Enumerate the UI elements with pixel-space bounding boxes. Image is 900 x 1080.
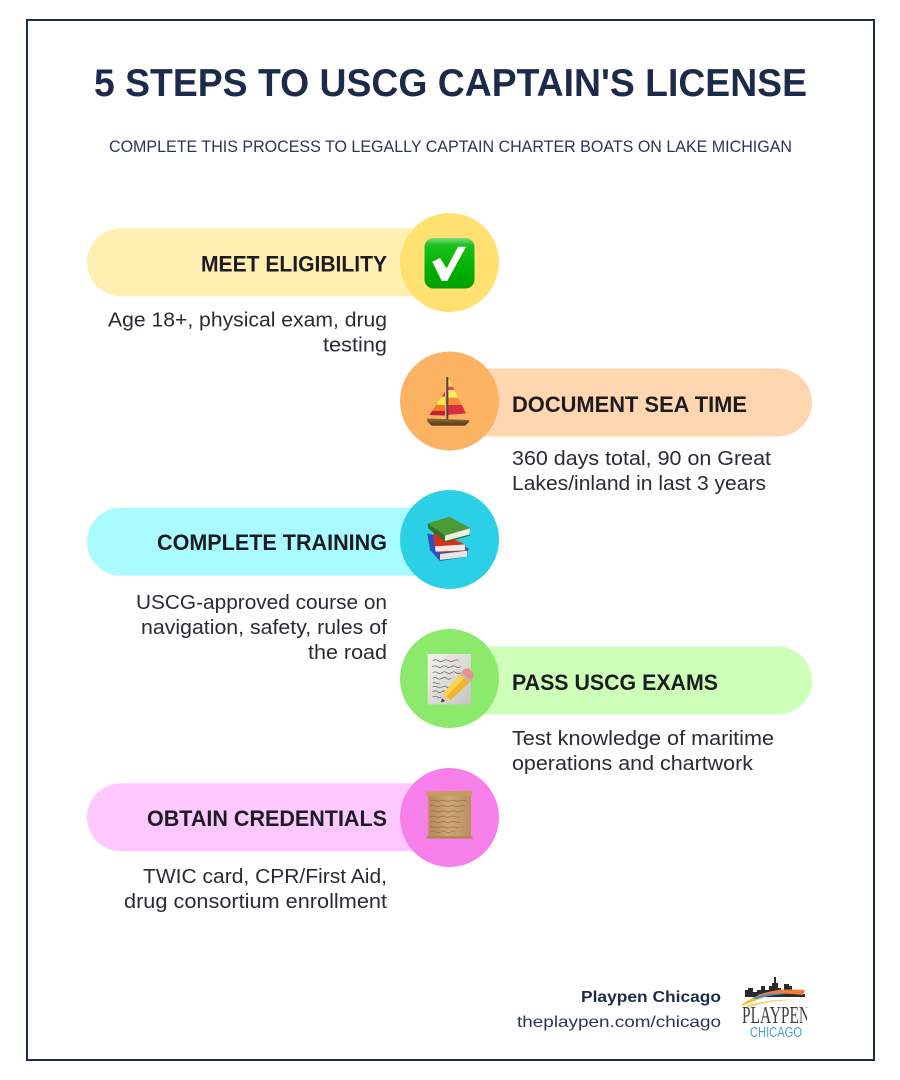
- step 3 pill: [87, 508, 449, 576]
- step 4 heading: PASS USCG EXAMS: [512, 670, 718, 695]
- step 5 description: TWIC card, CPR/First Aid,: [143, 866, 387, 888]
- step 2 description: [512, 448, 771, 495]
- logo word PLAYPEN: PLAYPEN: [742, 1003, 810, 1029]
- step 4: pass USCG exams: [400, 629, 812, 775]
- step 2 heading: DOCUMENT SEA TIME: [512, 392, 747, 417]
- title: 5 STEPS TO USCG CAPTAIN'S LICENSE: [94, 62, 807, 105]
- step 4 circle: [400, 629, 499, 728]
- step 2 description: Lakes/inland in last 3 years: [512, 473, 766, 495]
- step 4 description: Test knowledge of maritime: [512, 728, 774, 750]
- step 3: complete training: [87, 490, 499, 664]
- step 3 circle: [400, 490, 499, 589]
- step 5 description: [124, 866, 387, 913]
- footer URL: theplaypen.com/chicago: [517, 1014, 721, 1031]
- logo word CHICAGO: CHICAGO: [750, 1024, 802, 1041]
- step 3 description: the road: [308, 642, 387, 664]
- step 3 description: USCG-approved course on: [136, 592, 387, 614]
- icon: parchment scroll: [426, 791, 473, 839]
- step 5 heading: OBTAIN CREDENTIALS: [147, 806, 387, 831]
- step 5 circle: [400, 768, 499, 867]
- step 1: meet eligibility: [87, 213, 499, 356]
- icon: paper and pencil: [428, 654, 474, 704]
- subtitle: COMPLETE THIS PROCESS TO LEGALLY CAPTAIN CHARTER BOATS ON LAKE MICHIGAN: [109, 138, 792, 156]
- icon: green check box: [424, 238, 474, 288]
- step 2 pill: [449, 368, 812, 436]
- step 3 heading: COMPLETE TRAINING: [157, 530, 387, 555]
- step 4 description: operations and chartwork: [512, 753, 754, 775]
- step 5: obtain credentials: [87, 768, 499, 913]
- icon: sailboat: [427, 375, 470, 426]
- step 4 pill: [449, 646, 812, 714]
- step 5 pill: [87, 783, 449, 851]
- step 3 description: [136, 592, 387, 664]
- footer brand name: Playpen Chicago: [581, 989, 721, 1006]
- step 1 heading: MEET ELIGIBILITY: [201, 252, 387, 276]
- step 3 description: navigation, safety, rules of: [141, 617, 387, 639]
- step 4 description: [512, 728, 774, 775]
- step 1 circle: [400, 213, 499, 312]
- step 2: document sea time: [400, 352, 812, 495]
- step 2 circle: [400, 352, 499, 450]
- step 2 description: 360 days total, 90 on Great: [512, 448, 771, 470]
- step 1 description: testing: [323, 334, 387, 356]
- logo: Playpen Chicago skyline: [742, 977, 807, 1037]
- icon: stack of books: [427, 517, 471, 561]
- step 5 description: drug consortium enrollment: [124, 891, 387, 913]
- step 1 description: [108, 310, 387, 356]
- step 1 description: Age 18+, physical exam, drug: [108, 310, 387, 332]
- step 1 pill: [87, 228, 449, 296]
